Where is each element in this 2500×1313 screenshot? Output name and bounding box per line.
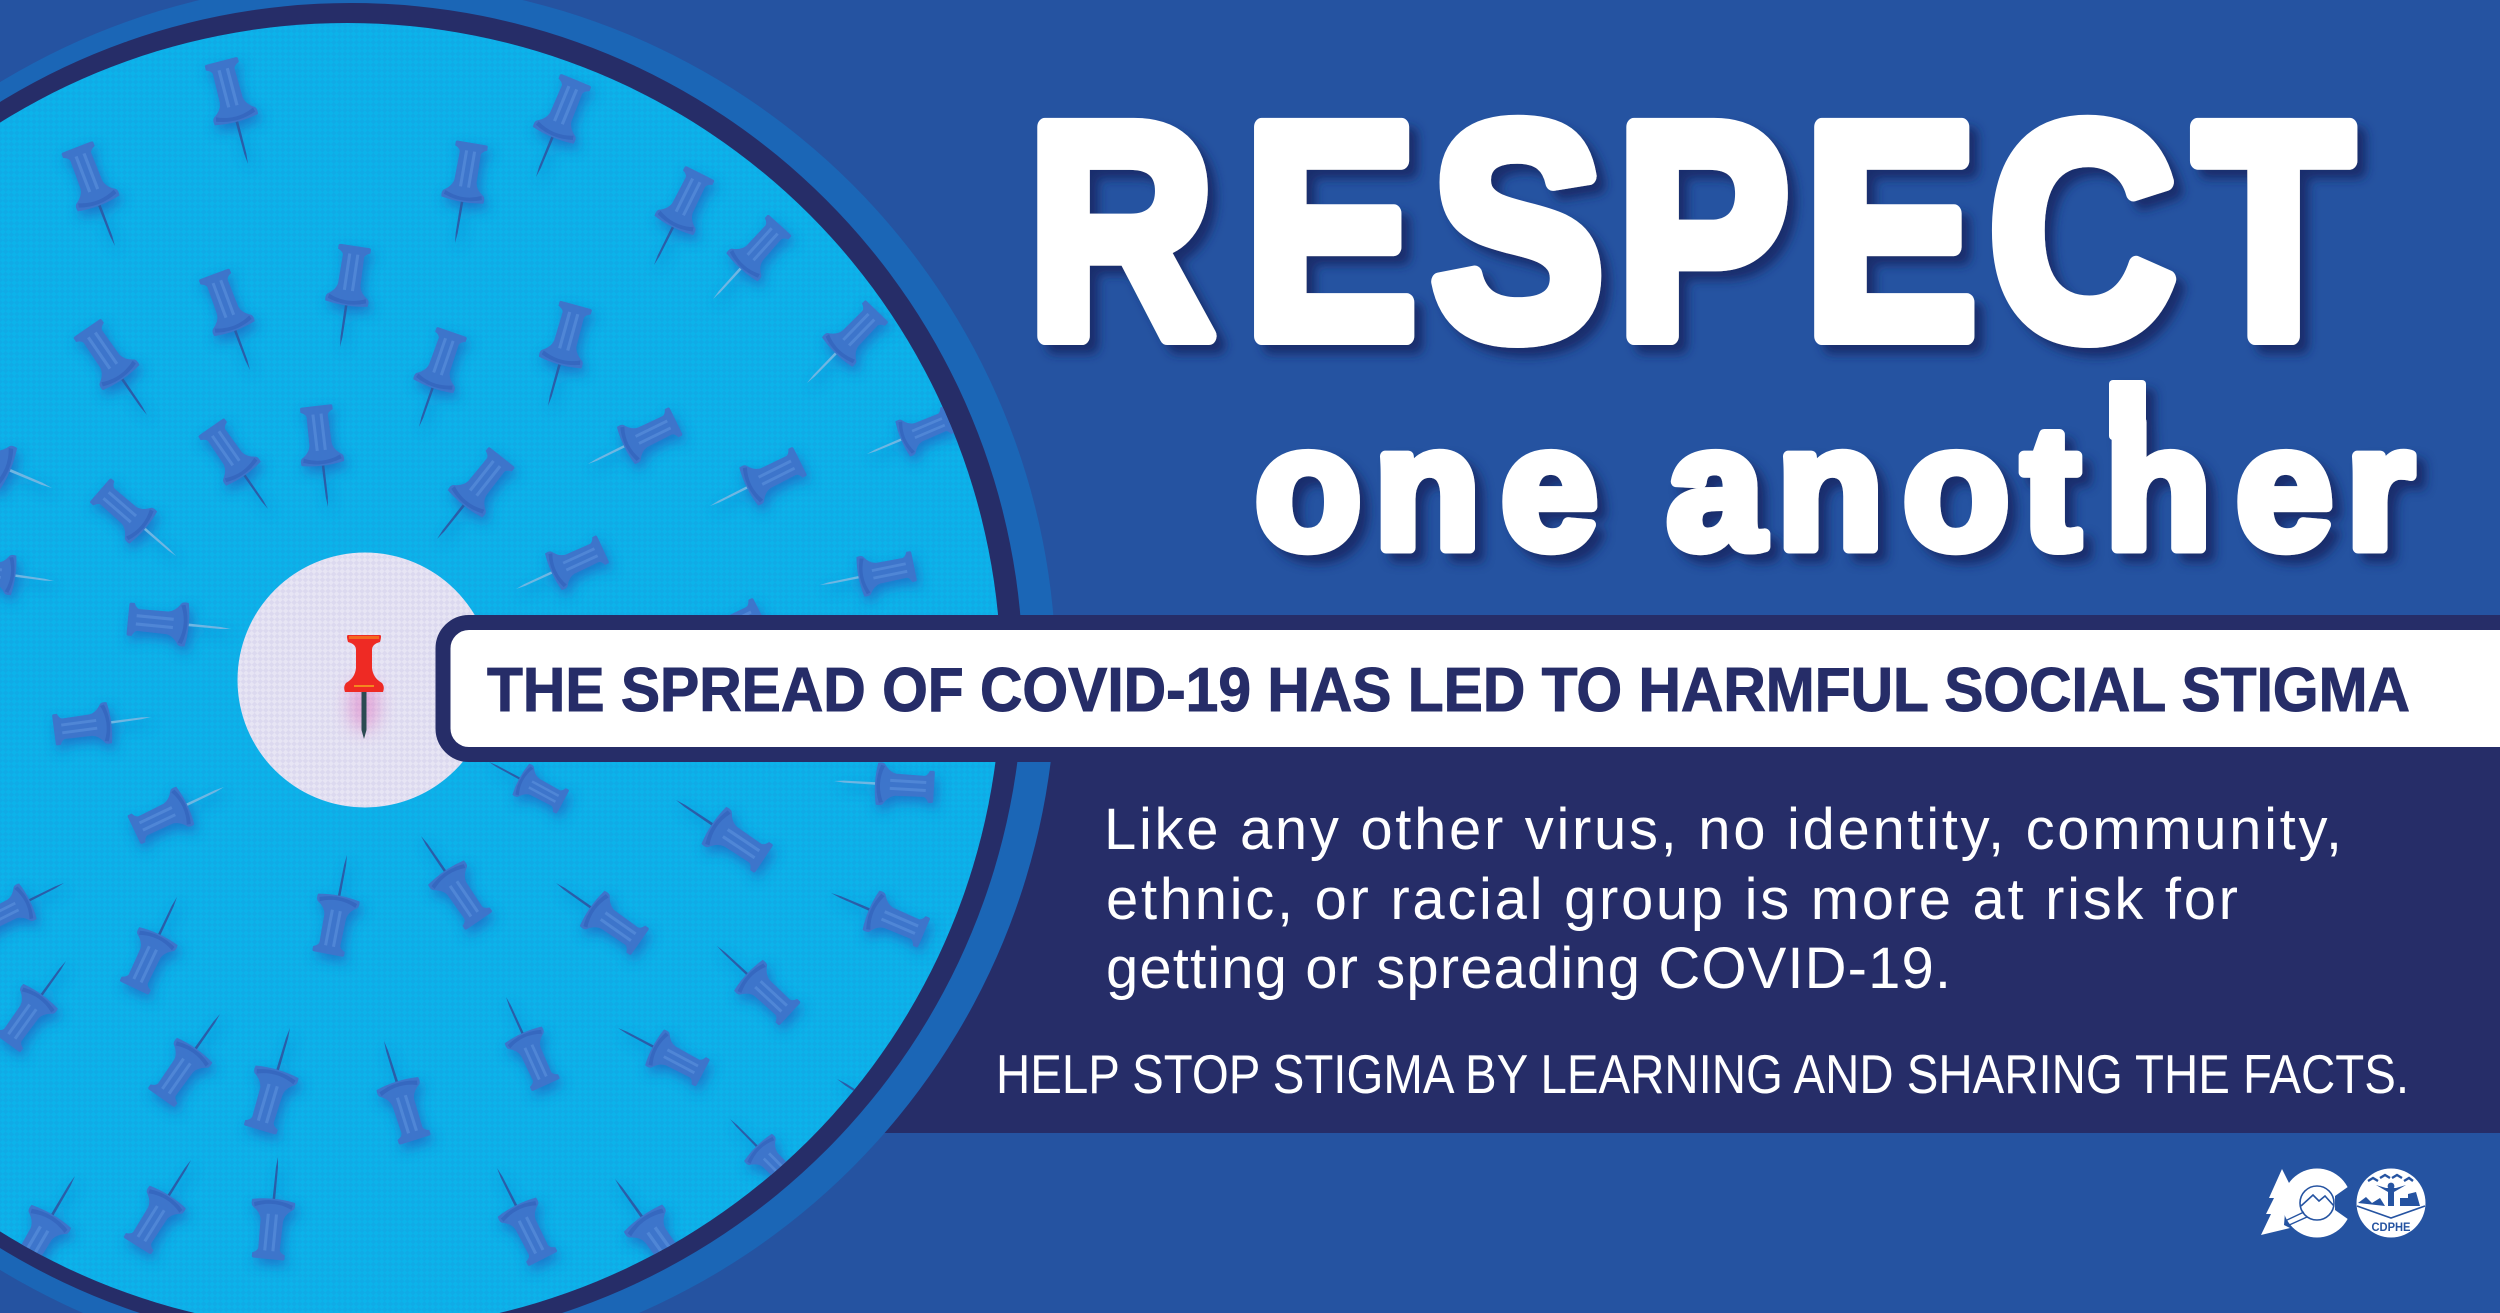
body text: getting or spreading COVID-19. (1106, 936, 1951, 1001)
body text (1104, 797, 2342, 1001)
outer ring (0, 0, 1056, 1313)
highlighted white spot (238, 552, 492, 808)
callout band (443, 622, 2500, 754)
subtitle: one another: one another (1255, 390, 2414, 585)
scattered blue pushpins (0, 55, 957, 1284)
cyan disc (0, 23, 1001, 1313)
panel: navy message panel (700, 762, 2500, 1133)
body text: ethnic, or racial group is more at risk for (1106, 867, 2238, 932)
icon: CDPHE logo (2356, 1168, 2426, 1238)
icon: red pushpin (344, 635, 384, 739)
icon: Colorado logo (2261, 1168, 2356, 1238)
navy circle border (0, 3, 1023, 1313)
title: RESPECT: RESPECT (1028, 61, 2353, 401)
band text: THE SPREAD OF COVID-19 HAS LED TO HARMFUL SOCIAL STIGMA (487, 656, 2410, 725)
body text: Like any other virus, no identity, community, (1104, 797, 2342, 862)
icon: CDPHE logo: CDPHE (2372, 1222, 2411, 1234)
